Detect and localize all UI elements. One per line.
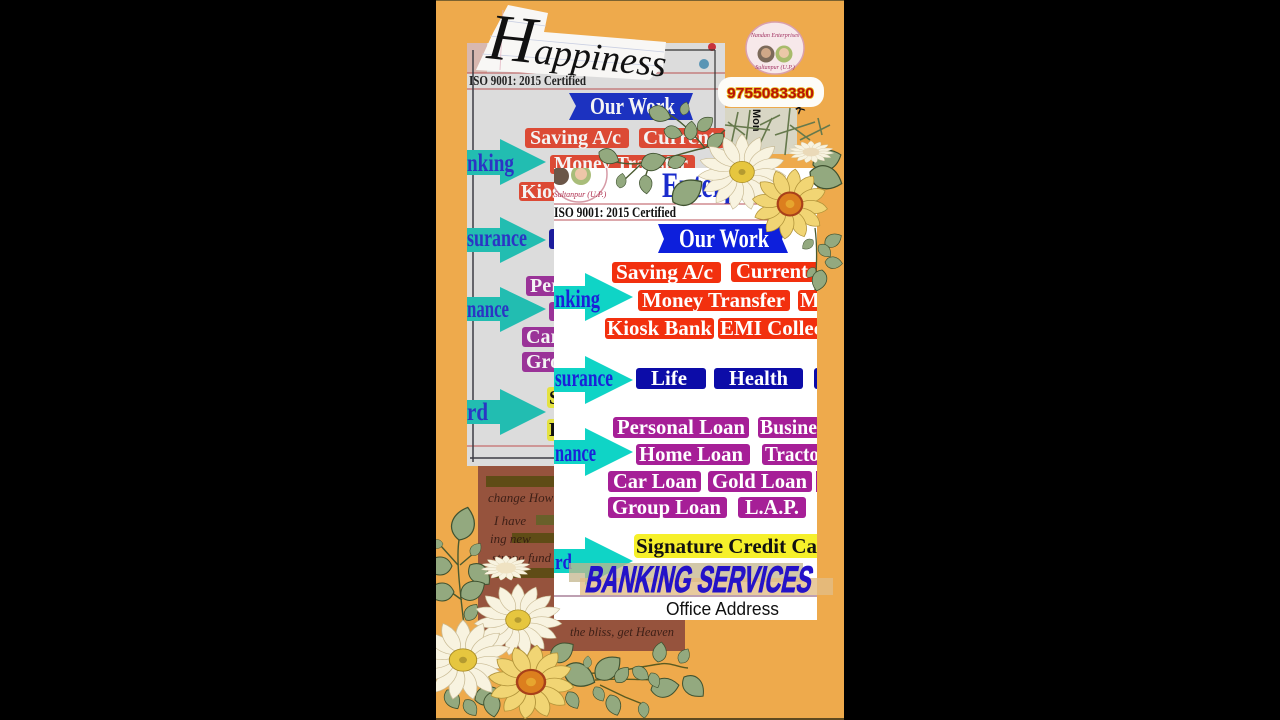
panel: brown handwritten paper: the bliss, get Heaven bbox=[570, 624, 674, 639]
arrow labels bbox=[555, 286, 613, 574]
grey page cut off pills: P bbox=[549, 419, 561, 441]
panel: brown handwritten paper: I have bbox=[493, 513, 526, 528]
grey page cut off pills: Gro bbox=[526, 351, 560, 373]
banking pills: Money Transfer bbox=[642, 288, 785, 312]
white daisy bottom bbox=[474, 584, 562, 656]
grey page arrows bbox=[467, 139, 546, 435]
credit card yellow pill: Signature Credit Ca bbox=[636, 534, 817, 558]
loan pills bbox=[608, 417, 817, 518]
logo on white page bbox=[554, 168, 608, 203]
phone number pill bbox=[718, 77, 824, 107]
grey page red pills bbox=[519, 127, 725, 203]
loan pills: Tracto bbox=[765, 442, 819, 466]
panel: brown handwritten paper: change How bbox=[488, 490, 554, 505]
herb foliage top right: Mon bbox=[750, 109, 762, 132]
grey page red pills: Money Transfer bbox=[554, 153, 688, 175]
grey page cut off pills: Car bbox=[526, 326, 559, 348]
arrow labels: nance bbox=[555, 440, 596, 467]
phone number pill: 9755083380 bbox=[727, 85, 814, 102]
arrow labels: rd bbox=[555, 549, 572, 574]
note paper with Happiness bbox=[476, 0, 671, 92]
loan pills: Gold Loan bbox=[712, 469, 807, 493]
panel: brown handwritten paper: strong fund bbox=[492, 550, 552, 565]
branch right side bbox=[800, 228, 845, 293]
grey page Our Work banner: Our Work bbox=[590, 94, 676, 120]
logo on white page: Sultanpur (U.P.) bbox=[554, 190, 607, 199]
banking pills bbox=[605, 262, 817, 339]
insurance pills bbox=[636, 368, 817, 389]
loan pills: Home Loan bbox=[639, 442, 743, 466]
grey page arrow labels: rd bbox=[467, 399, 488, 426]
yellow daisy bbox=[752, 168, 828, 240]
grey page cut off pills: S bbox=[549, 387, 560, 409]
Our Work banner: Our Work bbox=[679, 224, 769, 253]
small beige flower bottom bbox=[481, 556, 531, 581]
insurance pills: Health bbox=[729, 366, 788, 390]
arrow labels: nking bbox=[555, 286, 600, 313]
white daisy left bbox=[436, 620, 510, 700]
insurance pills: Life bbox=[651, 366, 687, 390]
ISO certification text: ISO 9001: 2015 Certified bbox=[554, 205, 676, 221]
panel: brown handwritten paper bbox=[478, 466, 685, 651]
loan pills: Personal Loan bbox=[617, 415, 745, 439]
small beige flower bbox=[788, 141, 834, 163]
round logo: Nandan Enterprises bbox=[750, 33, 800, 39]
grey page red pills: Saving A/c bbox=[530, 127, 621, 149]
banking pills: Kiosk Bank bbox=[607, 316, 712, 340]
herb foliage top right: K bbox=[792, 104, 807, 116]
branch bottom left bbox=[436, 506, 490, 621]
loan pills: Group Loan bbox=[612, 495, 721, 519]
grey page arrow labels: nance bbox=[467, 296, 509, 323]
grey page arrow labels: nking bbox=[467, 150, 514, 177]
loan pills: Car Loan bbox=[613, 469, 697, 493]
banking services banner bbox=[569, 558, 833, 600]
banking pills: Current bbox=[736, 259, 808, 283]
banking pills: M bbox=[800, 288, 820, 312]
Happiness script title: Happiness bbox=[483, 0, 671, 92]
grey page cut off pills: Per bbox=[530, 275, 560, 297]
banking services banner: BANKING SERVICES bbox=[582, 558, 817, 600]
loan pills: L.A.P. bbox=[745, 495, 799, 519]
panel: grey back page bbox=[467, 43, 725, 466]
banking pills: Saving A/c bbox=[616, 260, 713, 284]
round logo: Sultanpur (U.P.) bbox=[755, 64, 795, 71]
office address text: Office Address bbox=[666, 599, 779, 619]
loan pills: Busine bbox=[760, 415, 817, 439]
large white daisy bbox=[698, 134, 786, 210]
orange background panel bbox=[436, 0, 844, 720]
grey page red pills: Current bbox=[643, 127, 716, 149]
yellow daisy bottom bbox=[487, 644, 575, 720]
round logo bbox=[746, 22, 804, 74]
panel: brown handwritten paper: ing new bbox=[490, 531, 531, 546]
branch with leaves top bbox=[596, 101, 728, 212]
herb foliage top right bbox=[725, 104, 830, 155]
grey page arrow labels: surance bbox=[467, 225, 527, 252]
banking pills: EMI Collect bbox=[720, 316, 830, 340]
branch bottom right bbox=[546, 637, 709, 719]
flower group top right bbox=[698, 134, 846, 240]
flower group bottom left bbox=[436, 555, 574, 719]
grey page red pills: Kiosk bbox=[521, 181, 572, 203]
heading fragment Enterprises: Enterp bbox=[662, 165, 738, 205]
grey page cut off pills bbox=[522, 229, 554, 441]
arrows bbox=[554, 273, 633, 585]
arrow labels: surance bbox=[555, 365, 613, 392]
grey page ISO text: ISO 9001: 2015 Certified bbox=[469, 74, 586, 89]
panel: white front page bbox=[554, 168, 817, 620]
grey page arrow labels bbox=[467, 150, 527, 426]
